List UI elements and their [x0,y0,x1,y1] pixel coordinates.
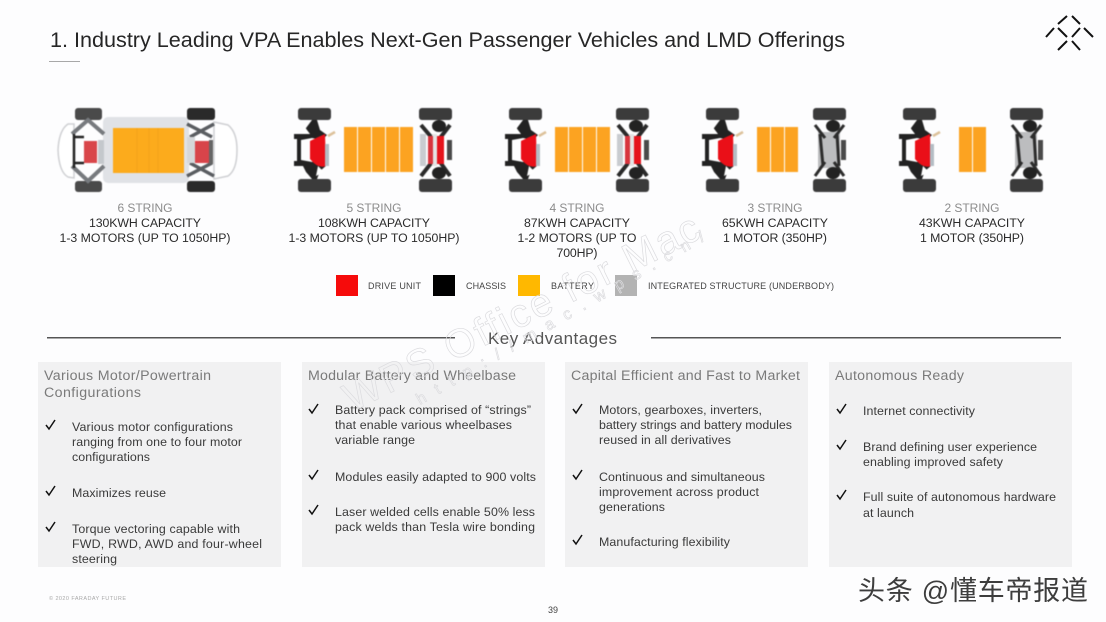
panel: modular battery and wheelbase: Battery pack comprised of “strings” [335,403,531,417]
panel: various motor/powertrain configurations: Various Motor/Powertrain [44,368,211,384]
caption: 2 string [919,201,1025,245]
caption: 4 string: 4 STRING [550,201,604,215]
panel: capital efficient and fast to market: Continuous and simultaneous [599,470,765,484]
platform diagram: 4 string [505,108,649,192]
panel: modular battery and wheelbase: Modular Battery and Wheelbase [308,368,516,384]
panel: capital efficient and fast to market: generations [599,500,665,514]
caption: 6 string: 6 STRING [118,201,172,215]
platform diagram: 5 string [294,108,452,192]
legend [336,275,834,296]
panel: various motor/powertrain configurations: Maximizes reuse [72,486,166,500]
panel: modular battery and wheelbase [302,362,545,567]
footer copyright: © 2020 FARADAY FUTURE [49,595,126,602]
caption: 4 string: 87KWH CAPACITY [524,216,630,230]
caption: 6 string [60,201,230,245]
panel: capital efficient and fast to market [565,362,808,567]
legend: INTEGRATED STRUCTURE (UNDERBODY) [648,281,834,291]
caption: 5 string: 1-3 MOTORS (UP TO 1050HP) [288,231,460,245]
panel: autonomous ready [829,362,1072,567]
caption: 4 string: 700HP) [556,246,598,260]
panel: various motor/powertrain configurations [38,362,281,567]
panel: capital efficient and fast to market: improvement across product [599,485,760,499]
panel: various motor/powertrain configurations: FWD, RWD, AWD and four-wheel [72,537,262,551]
panel: various motor/powertrain configurations: steering [72,552,117,566]
heading: key advantages: Key Advantages [488,329,617,348]
page number: 39 [548,605,558,615]
caption: 3 string: 65KWH CAPACITY [722,216,828,230]
panel: various motor/powertrain configurations: Configurations [44,385,141,401]
panel: various motor/powertrain configurations: Various motor configurations [72,420,233,434]
caption: 3 string: 3 STRING [748,201,802,215]
caption: 4 string [518,201,636,260]
panel: capital efficient and fast to market: Motors, gearboxes, inverters, [599,403,762,417]
caption: 5 string: 108KWH CAPACITY [318,216,430,230]
panel: modular battery and wheelbase: Modules easily adapted to 900 volts [335,470,536,484]
caption: 6 string: 1-3 MOTORS (UP TO 1050HP) [60,231,230,245]
software watermark: http://mac.wps.cn/ [414,228,708,408]
caption: 2 string: 1 MOTOR (350HP) [920,231,1024,245]
panel: modular battery and wheelbase: pack welds than Tesla wire bonding [335,520,535,534]
panel: autonomous ready: at launch [863,506,914,520]
legend: CHASSIS [466,281,506,291]
section divider left [47,337,455,338]
caption: 2 string: 43KWH CAPACITY [919,216,1025,230]
legend: BATTERY [551,281,594,291]
panel: modular battery and wheelbase: variable range [335,433,415,447]
panel: various motor/powertrain configurations: configurations [72,450,150,464]
panel: various motor/powertrain configurations: ranging from one to four motor [72,435,242,449]
section divider right [651,337,1061,338]
panel: capital efficient and fast to market: Capital Efficient and Fast to Market [571,368,800,384]
caption: 2 string: 2 STRING [944,201,1000,215]
caption: 5 string [288,201,460,245]
panel: autonomous ready: Autonomous Ready [835,368,965,384]
platform diagram: 6 string with body [58,108,237,192]
caption: 3 string [722,201,828,245]
caption: 5 string: 5 STRING [346,201,402,215]
publisher watermark: 头条 @懂车帝报道 [858,576,1088,606]
caption: 6 string: 130KWH CAPACITY [89,216,201,230]
icon: brand logo [1046,16,1093,50]
panel: capital efficient and fast to market: battery strings and battery modules [599,418,792,432]
panel: modular battery and wheelbase: that enable various wheelbases [335,418,512,432]
title underline [49,61,80,62]
caption: 3 string: 1 MOTOR (350HP) [723,231,827,245]
panel: autonomous ready: Brand defining user experience [863,440,1037,454]
panel: autonomous ready: enabling improved safety [863,455,1004,469]
panel: autonomous ready: Internet connectivity [863,404,976,418]
panel: autonomous ready: Full suite of autonomous hardware [863,490,1056,504]
title: 1. Industry Leading VPA Enables Next-Gen Passenger Vehicles and LMD Offerings [50,27,845,52]
platform diagram: 2 string [899,108,1043,192]
legend: DRIVE UNIT [368,281,422,291]
panel: various motor/powertrain configurations: Torque vectoring capable with [72,522,240,536]
platform diagram: 3 string [702,108,846,192]
software watermark: WPS Office for Mac [336,206,707,420]
panel: capital efficient and fast to market: reused in all derivatives [599,433,731,447]
panel: modular battery and wheelbase: Laser welded cells enable 50% less [335,505,535,519]
panel: capital efficient and fast to market: Manufacturing flexibility [599,535,731,549]
caption: 4 string: 1-2 MOTORS (UP TO [518,231,636,245]
